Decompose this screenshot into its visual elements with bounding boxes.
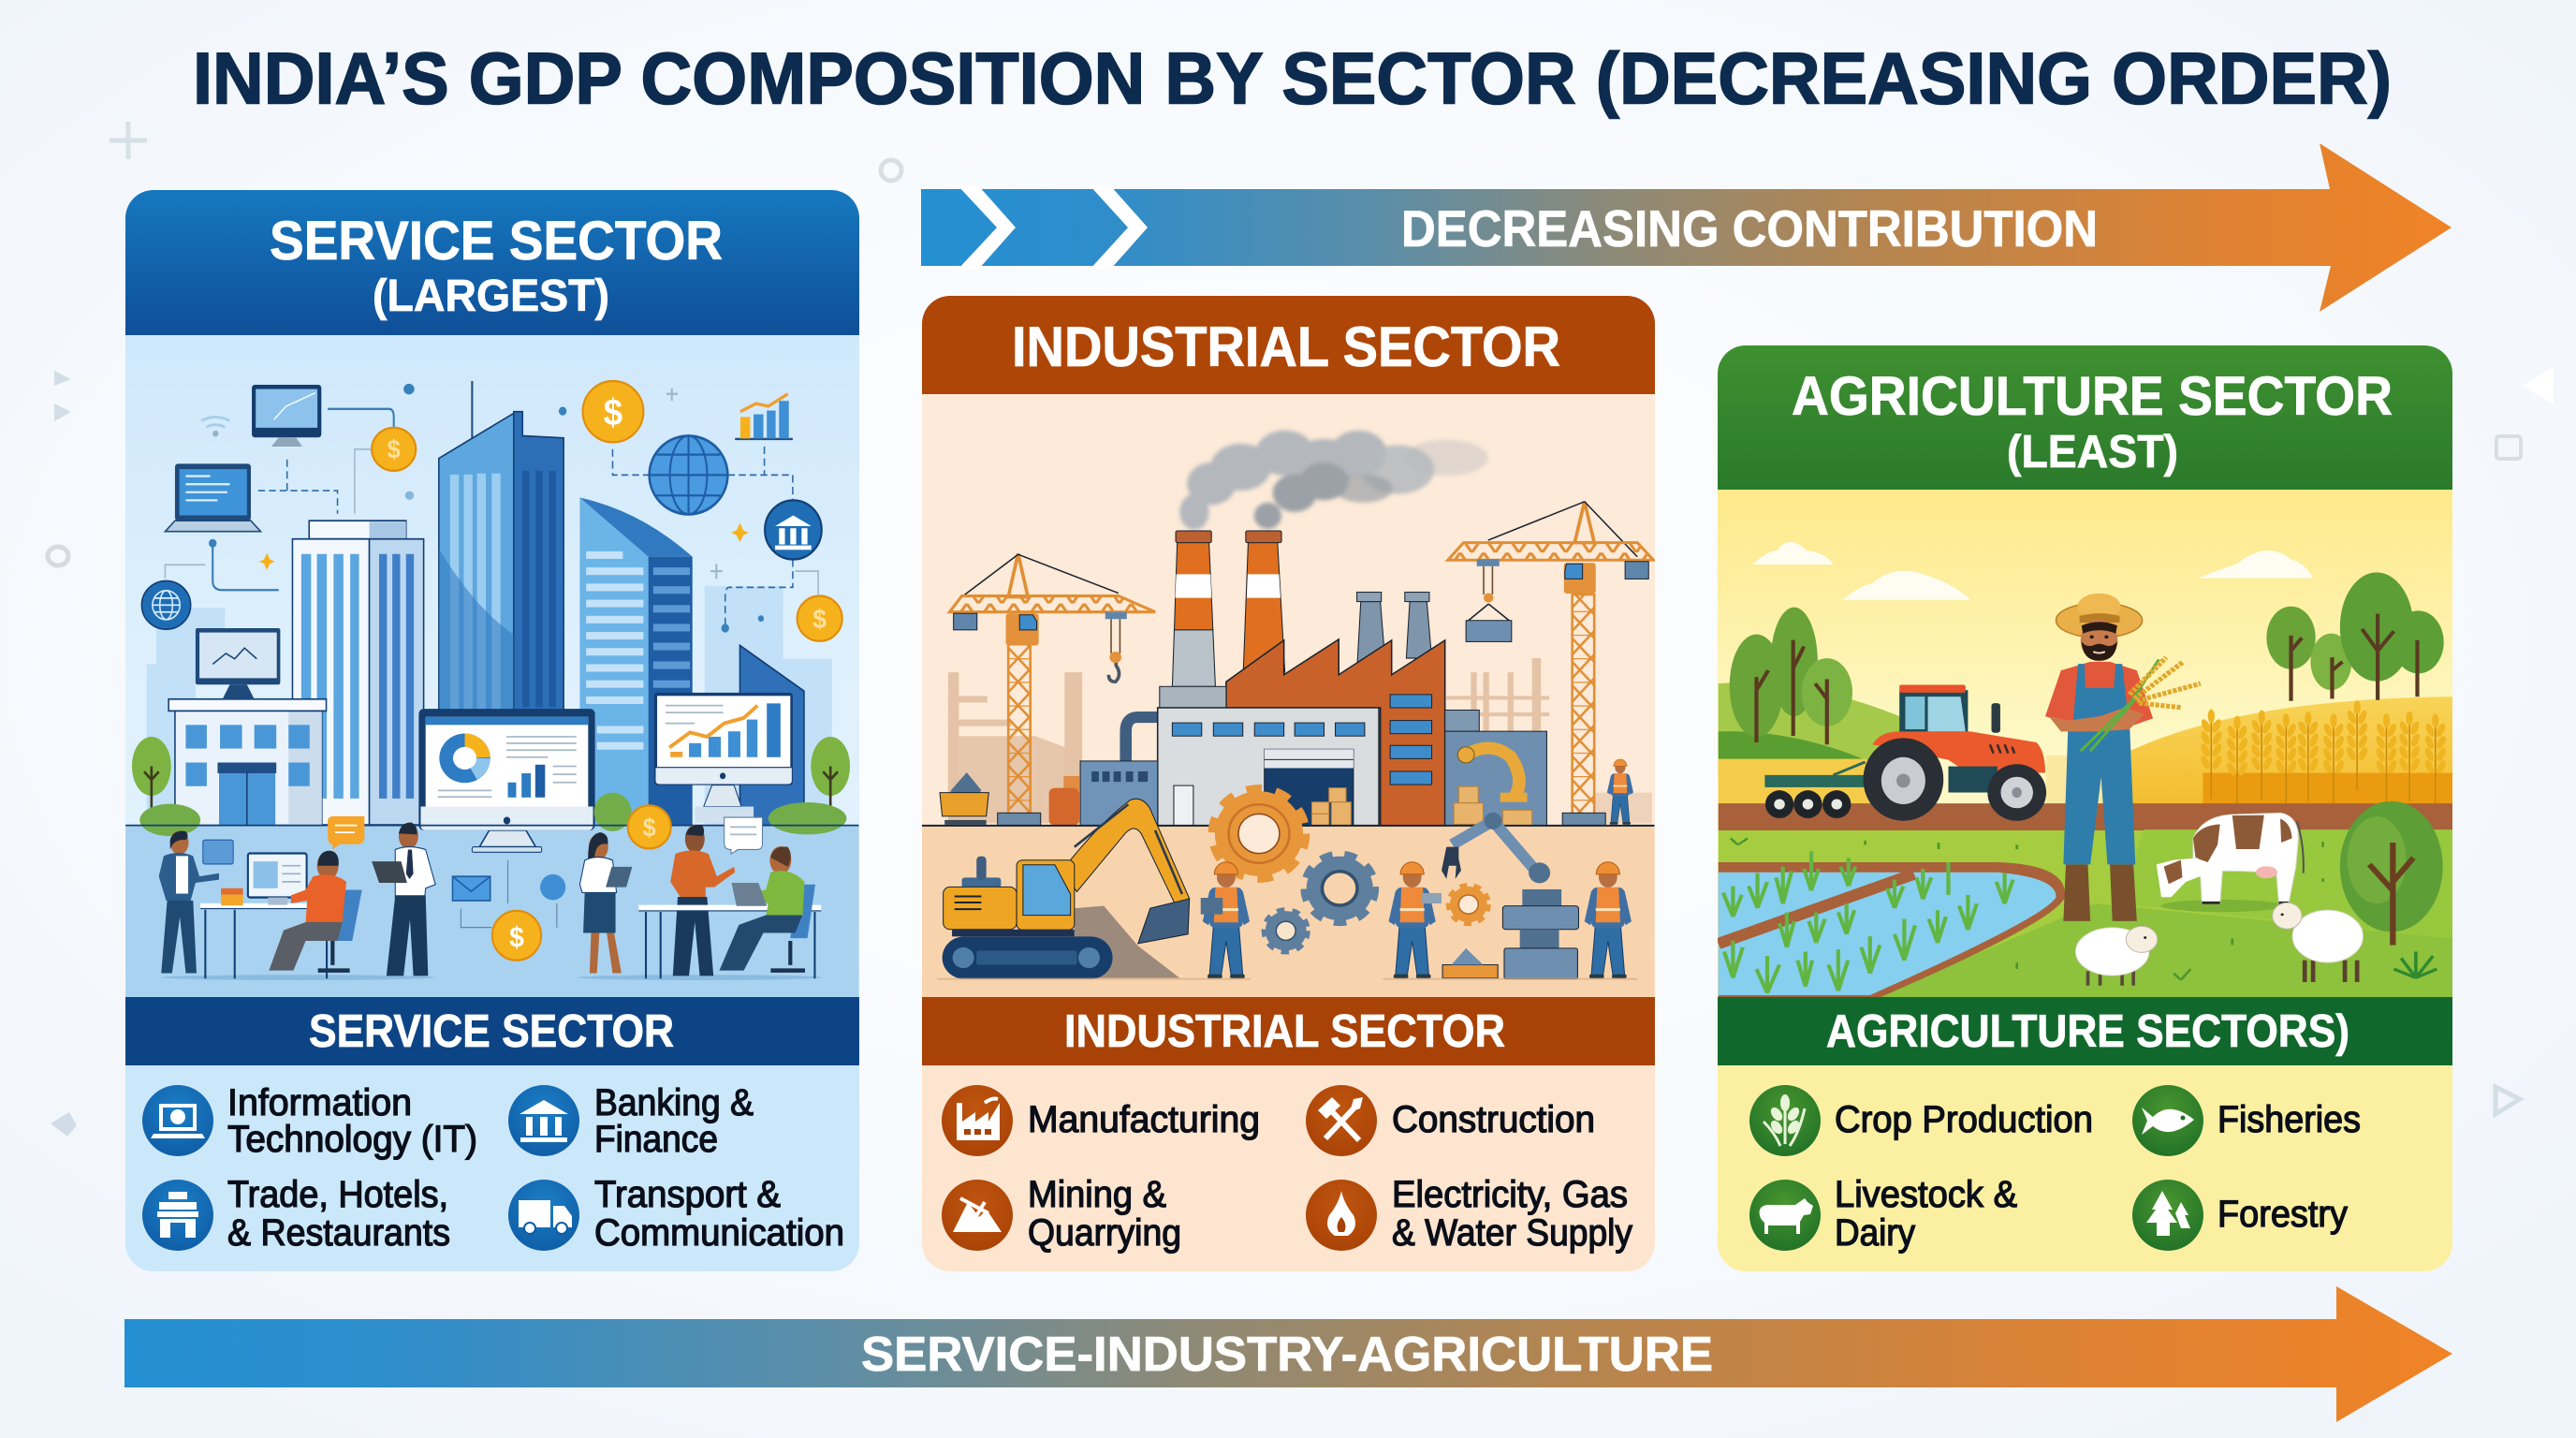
header: industrial sector: [922, 296, 1655, 394]
right monitor: [704, 785, 741, 807]
front tree: [2340, 801, 2443, 932]
globes and bank: [650, 436, 727, 514]
panel: agriculture sector: [1718, 345, 2452, 1271]
panel body: agriculture: [1718, 1065, 2452, 1271]
ground line: [922, 824, 1655, 828]
panel: industrial sector: [922, 296, 1655, 1271]
tower B: [471, 381, 474, 438]
list item: crop production: [1749, 1085, 2093, 1156]
robot arm: [1453, 821, 1540, 875]
list item: mining and quarrying: Quarrying: [1028, 1212, 1181, 1254]
header: service sector (largest): SERVICE SECTOR: [270, 211, 723, 271]
silhouettes: [948, 658, 1652, 823]
illustration: city offices and people: [125, 335, 859, 997]
list item: forestry: [2132, 1180, 2348, 1251]
gears: [1215, 791, 1303, 876]
list item: information technology: Information: [227, 1082, 412, 1123]
trees: [132, 737, 171, 796]
big monitor: [479, 830, 535, 847]
list item: trade hotels restaurants: & Restaurants: [227, 1212, 450, 1254]
wheat: [2200, 710, 2223, 799]
arrow: decreasing contribution: [921, 143, 2452, 312]
band: service sector: SERVICE SECTOR: [309, 1006, 674, 1057]
standing man: [399, 828, 418, 846]
list item: manufacturing: [942, 1085, 1260, 1156]
band: industrial sector: [922, 997, 1655, 1065]
illustration: factory, cranes and workers: [922, 394, 1655, 1000]
header: agriculture sector (least): [1718, 345, 2452, 490]
left crane: [1008, 644, 1031, 814]
coins: $: [604, 391, 622, 433]
connector lines: [258, 447, 793, 626]
smoke: [1179, 431, 1488, 530]
header: agriculture sector (least): (LEAST): [2007, 427, 2178, 477]
coins: $: [812, 604, 827, 634]
list item: transport and communication: Communication: [594, 1212, 844, 1254]
list item: electricity gas water: & Water Supply: [1392, 1212, 1632, 1254]
envelope: [452, 876, 490, 901]
list item: forestry: Forestry: [2217, 1194, 2348, 1235]
header: agriculture sector (least): AGRICULTURE SECTOR: [1792, 366, 2393, 427]
coins: $: [509, 921, 524, 953]
small bar chart: [735, 438, 793, 440]
pond: [1719, 862, 2065, 997]
wifi: [201, 417, 230, 427]
coins: [372, 381, 842, 961]
clouds: [1752, 542, 2313, 600]
saw roof building: [1226, 639, 1445, 826]
panel body: service: [125, 1065, 859, 1271]
header: industrial sector: INDUSTRIAL SECTOR: [1012, 315, 1560, 378]
list item: banking and finance: Finance: [594, 1119, 718, 1160]
office left: [175, 710, 322, 826]
list item: fisheries: Fisheries: [2217, 1099, 2361, 1140]
list item: construction: [1306, 1085, 1595, 1156]
list item: banking and finance: [508, 1082, 754, 1160]
workers: [1203, 862, 1250, 978]
list item: crop production: Crop Production: [1835, 1099, 2093, 1140]
annexes: [1080, 761, 1158, 826]
monitor top of office: [196, 628, 280, 684]
list item: transport and communication: Transport &: [594, 1174, 781, 1215]
hills: [1719, 682, 1910, 777]
list item: trade hotels restaurants: [142, 1174, 450, 1254]
arrow: decreasing contribution: DECREASING CONTRIBUTION: [1401, 199, 2098, 257]
desk right: [638, 904, 822, 910]
header: service sector (largest): (LARGEST): [373, 271, 609, 321]
arrow: service-industry-agriculture: SERVICE-INDUSTRY-AGRICULTURE: [861, 1328, 1713, 1382]
list item: mining and quarrying: [942, 1174, 1181, 1254]
list item: fisheries: [2132, 1085, 2361, 1156]
farmer: [2063, 864, 2137, 921]
list item: livestock and dairy: Livestock &: [1835, 1174, 2017, 1215]
list item: information technology: Technology (IT): [227, 1119, 477, 1160]
coins: $: [643, 814, 656, 843]
list item: livestock and dairy: [1749, 1174, 2017, 1254]
arrow: service-industry-agriculture: [124, 1286, 2452, 1422]
top monitor: [252, 385, 321, 437]
illustration: farm scene: [1718, 490, 2452, 998]
road: [1719, 803, 2452, 830]
grass: [1719, 830, 2452, 998]
list item: construction: Construction: [1392, 1099, 1595, 1140]
sheep: [2088, 971, 2133, 986]
list item: transport and communication: [508, 1174, 844, 1254]
dirt and excavator: [1075, 906, 1179, 978]
band: industrial sector: INDUSTRIAL SECTOR: [1064, 1006, 1505, 1057]
tower C: [739, 645, 804, 826]
list item: electricity gas water: [1306, 1174, 1632, 1254]
panel body: industrial: [922, 1065, 1655, 1271]
laptop: [175, 463, 251, 521]
header: service sector (largest): [125, 190, 859, 335]
list item: information technology: [142, 1082, 477, 1160]
trees back: [1730, 572, 2444, 737]
cow: [2161, 900, 2284, 912]
band: agriculture sectors: AGRICULTURE SECTORS): [1826, 1006, 2349, 1057]
band: service sector: [125, 997, 859, 1065]
band: agriculture sectors: [1718, 997, 2452, 1065]
main building: [1160, 686, 1226, 708]
list item: mining and quarrying: Mining &: [1028, 1174, 1166, 1215]
chimneys: [1174, 543, 1213, 630]
tower A: [309, 521, 406, 539]
tractor and plow: [1764, 775, 1867, 787]
list item: livestock and dairy: Dairy: [1835, 1212, 1915, 1254]
man orange: [724, 817, 762, 854]
woman: [588, 835, 608, 858]
coins: $: [388, 435, 401, 464]
cart: [949, 772, 981, 798]
background decorations: [48, 122, 2554, 1137]
list item: trade hotels restaurants: Trade, Hotels,: [227, 1174, 448, 1215]
title: INDIA’S GDP COMPOSITION BY SECTOR (DECREASING ORDER): [193, 37, 2392, 120]
panel: service sector: [125, 190, 859, 1271]
right crane: [1573, 594, 1594, 814]
rice: [1723, 851, 2013, 993]
list item: electricity gas water: Electricity, Gas: [1392, 1174, 1628, 1215]
list item: manufacturing: Manufacturing: [1028, 1099, 1260, 1140]
people left: [328, 816, 364, 849]
list item: banking and finance: Banking &: [594, 1082, 754, 1123]
